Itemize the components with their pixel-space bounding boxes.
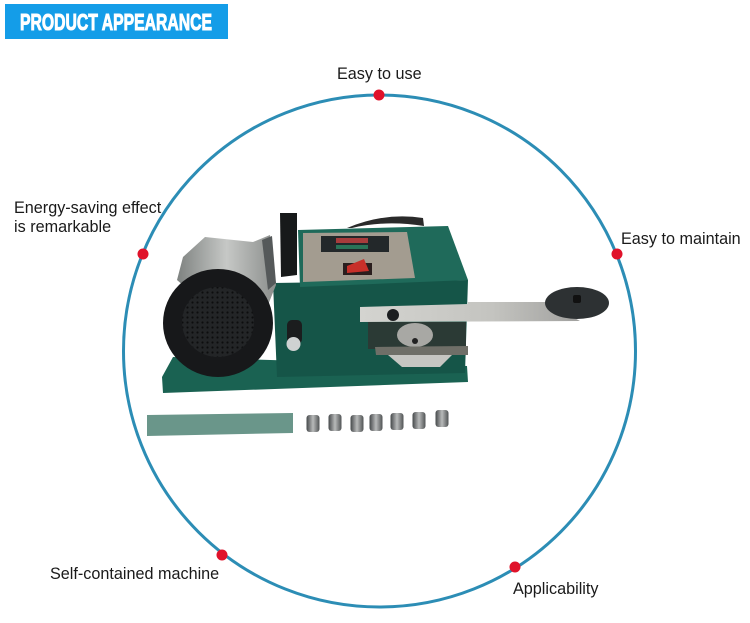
arm bolt: [387, 309, 399, 321]
label: self-contained machine: Self-contained machine: [50, 565, 219, 583]
machine body front: [273, 280, 468, 377]
motor bracket: [262, 236, 276, 290]
metal samples: [306, 410, 448, 432]
label: energy-saving effect: is remarkable: [14, 218, 111, 236]
title banner: [5, 4, 228, 39]
feature circle: [124, 95, 636, 607]
disc: [545, 287, 609, 319]
abrasive stone: [147, 413, 293, 436]
marker: self-contained: [216, 550, 228, 560]
base plate: [162, 357, 468, 393]
machine body top: [298, 226, 468, 287]
label: energy-saving effect: Energy-saving effect: [14, 199, 162, 217]
knob: [286, 320, 302, 351]
control panel: [303, 232, 415, 282]
arm: [360, 302, 580, 322]
marker: easy to use: [374, 90, 384, 100]
motor vent: [182, 287, 254, 357]
product machine: [162, 213, 609, 393]
motor fins: [177, 235, 276, 320]
disc bolt: [573, 295, 581, 303]
black post: [280, 213, 297, 277]
motor cap: [163, 269, 273, 377]
marker: energy-saving: [138, 248, 148, 260]
title banner: PRODUCT APPEARANCE: [20, 9, 212, 35]
label: easy to maintain: Easy to maintain: [621, 230, 741, 248]
marker: applicability: [510, 562, 520, 572]
lower mechanism: [368, 322, 468, 367]
marker: easy to maintain: [612, 248, 622, 260]
label: applicability: Applicability: [513, 580, 599, 598]
label: easy to use: Easy to use: [337, 65, 422, 83]
cable: [347, 216, 424, 228]
